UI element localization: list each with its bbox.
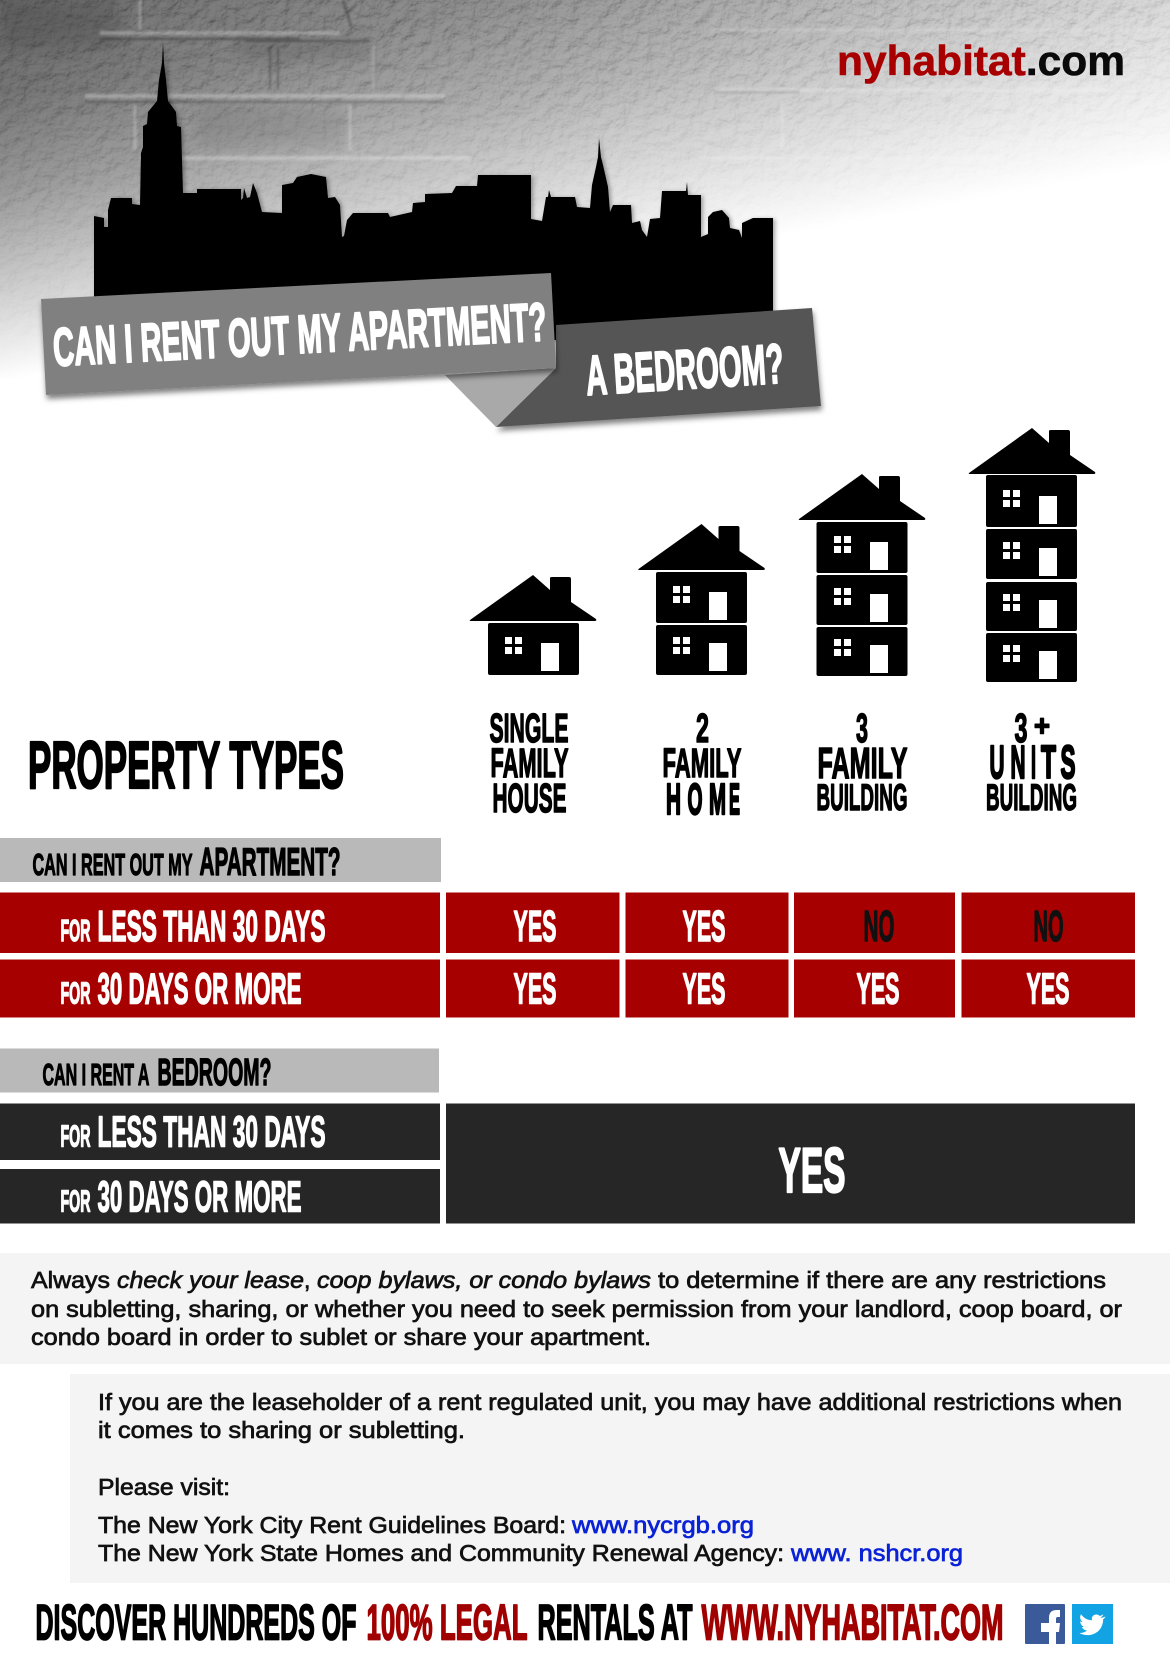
- row: apartment 30 days or more: YES: [682, 964, 726, 1014]
- note panel: check your lease: Always: [31, 1267, 110, 1293]
- note panel: check your lease: to determine if there are any restrictions: [658, 1267, 1106, 1293]
- icon: 3+ units building: [969, 428, 1095, 682]
- row: apartment less than 30 days: YES: [682, 902, 726, 951]
- section header: can I rent a bedroom: CAN I RENT A: [42, 1057, 150, 1092]
- ribbon: can I rent out my apartment: [41, 273, 556, 395]
- note panel: rent regulated units: www.nycrgb.org: [571, 1512, 754, 1538]
- note panel: rent regulated units: it comes to sharing or subletting.: [98, 1417, 465, 1443]
- text: E: [729, 775, 740, 824]
- icon: 3 family building: [799, 474, 925, 676]
- note panel: check your lease: ,: [304, 1267, 310, 1293]
- label: single family house: SINGLE: [490, 705, 568, 751]
- footer call to action: [36, 1594, 1004, 1650]
- label: 2 family home: FAMILY: [662, 740, 742, 786]
- row: apartment 30 days or more: YES: [856, 964, 900, 1014]
- heading: property types: PROPERTY TYPES: [28, 728, 344, 803]
- label: 3 family building: 3: [856, 705, 868, 751]
- label: 2 family home: [662, 705, 742, 824]
- label: single family house: FAMILY: [490, 740, 568, 786]
- label: 2 family home: H: [666, 775, 681, 824]
- label: 2 family home: O: [688, 775, 702, 824]
- rows: bedroom durations and yes: LESS THAN 30 DAYS: [98, 1108, 326, 1156]
- note panel: rent regulated units: www. nshcr.org: [790, 1540, 963, 1566]
- rows: bedroom durations and yes: YES: [778, 1136, 846, 1206]
- skyline silhouette: [94, 42, 773, 340]
- label: 3+ units building: I: [1031, 736, 1036, 788]
- section header: can I rent out my apartment: APARTMENT?: [200, 841, 340, 884]
- icon: facebook: [1025, 1604, 1065, 1644]
- label: 3+ units building: T: [1041, 736, 1056, 788]
- note panel: rent regulated units: If you are the leaseholder of a rent regulated unit, you may have additional restrictions when: [98, 1389, 1122, 1415]
- ribbon: A BEDROOM?: [445, 308, 821, 427]
- footer call to action: RENTALS AT: [538, 1594, 692, 1650]
- icon: 2 family house: [638, 524, 765, 675]
- row: apartment less than 30 days: FOR: [60, 913, 90, 948]
- ribbon: can I rent out my apartment: CAN I RENT OUT MY APARTMENT?: [51, 292, 548, 378]
- label: 3 family building: BUILDING: [816, 777, 908, 818]
- note panel: check your lease: on subletting, sharing, or whether you need to seek permission from your landlord, coop board, or: [31, 1296, 1122, 1322]
- rows: bedroom durations and yes: 30 DAYS OR MORE: [98, 1172, 302, 1222]
- row: apartment 30 days or more: [0, 960, 1135, 1018]
- header brick wall background: [0, 0, 1170, 402]
- label: 3+ units building: +: [1034, 710, 1050, 743]
- rows: bedroom durations and yes: FOR: [60, 1184, 90, 1218]
- label: 2 family home: M: [709, 775, 726, 824]
- section header: can I rent out my apartment: CAN I RENT OUT MY: [32, 847, 193, 882]
- note panel: rent regulated units: The New York City Rent Guidelines Board:: [98, 1512, 566, 1538]
- label: 3+ units building: 3: [1014, 705, 1028, 751]
- label: 3+ units building: N: [1010, 736, 1026, 788]
- section header: can I rent a bedroom: BEDROOM?: [158, 1052, 272, 1094]
- label: 3 family building: [816, 705, 908, 818]
- rows: bedroom durations and yes: FOR: [60, 1118, 90, 1154]
- label: 3+ units building: S: [1060, 736, 1076, 788]
- row: apartment less than 30 days: LESS THAN 30 DAYS: [98, 902, 326, 951]
- footer call to action: 100% LEGAL: [366, 1594, 528, 1650]
- section header: can I rent a bedroom: [0, 1048, 439, 1094]
- row: apartment less than 30 days: YES: [514, 902, 556, 951]
- row: apartment less than 30 days: NO: [1034, 902, 1064, 951]
- note panel: check your lease: coop bylaws, or condo bylaws: [317, 1267, 652, 1293]
- row: apartment 30 days or more: FOR: [60, 976, 90, 1010]
- label: single family house: [490, 705, 568, 821]
- label: 2 family home: 2: [696, 705, 709, 751]
- footer call to action: DISCOVER HUNDREDS OF: [36, 1594, 356, 1650]
- label: 3+ units building: U: [990, 736, 1004, 788]
- title ribbon: [41, 273, 821, 427]
- row: apartment 30 days or more: YES: [514, 964, 556, 1014]
- note panel: check your lease: check your lease: [117, 1267, 304, 1293]
- logo: nyhabitat.com: nyhabitat.com: [837, 37, 1125, 84]
- note panel: rent regulated units: [70, 1374, 1170, 1583]
- note panel: check your lease: [0, 1253, 1170, 1364]
- label: single family house: HOUSE: [492, 775, 566, 821]
- row: apartment less than 30 days: NO: [864, 902, 894, 951]
- note panel: rent regulated units: The New York State Homes and Community Renewal Agency:: [98, 1540, 784, 1566]
- icon: single family house: [470, 575, 596, 675]
- row: apartment 30 days or more: YES: [1026, 964, 1070, 1014]
- rows: bedroom durations and yes: [0, 1104, 1135, 1224]
- note panel: rent regulated units: Please visit:: [98, 1474, 230, 1500]
- label: 3 family building: FAMILY: [818, 739, 908, 788]
- row: apartment 30 days or more: 30 DAYS OR MORE: [98, 964, 302, 1014]
- ribbon: A BEDROOM?: A BEDROOM?: [584, 332, 785, 407]
- icon: twitter: [1072, 1604, 1113, 1644]
- label: 3+ units building: BUILDING: [986, 777, 1077, 818]
- note panel: check your lease: condo board in order to sublet or share your apartment.: [31, 1324, 651, 1350]
- section header: can I rent out my apartment: [0, 838, 441, 884]
- row: apartment less than 30 days: [0, 892, 1135, 953]
- label: 3+ units building: [986, 705, 1077, 818]
